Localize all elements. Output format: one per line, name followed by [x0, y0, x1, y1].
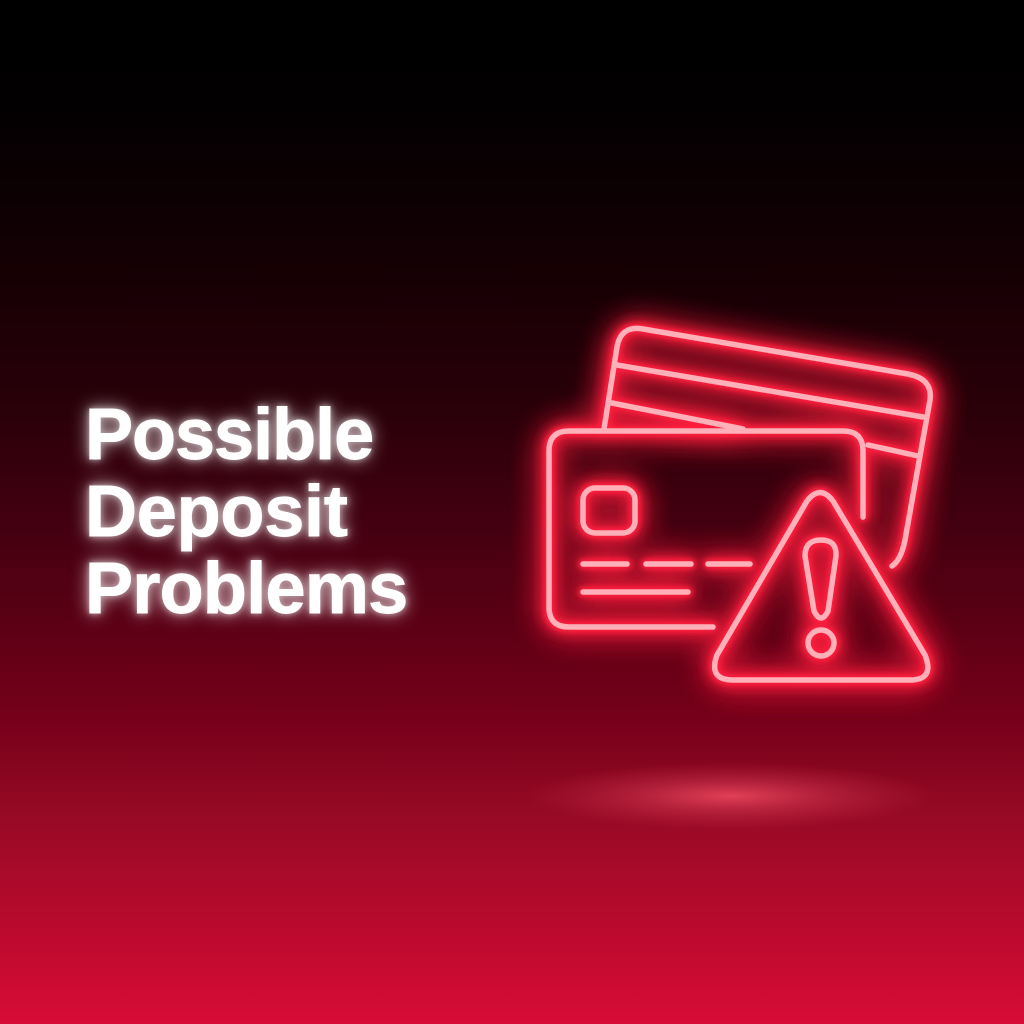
icon: credit cards with warning triangle	[549, 328, 930, 680]
back card	[604, 328, 930, 566]
front card	[549, 431, 863, 627]
icon: warning triangle	[715, 492, 928, 680]
title: Deposit	[85, 472, 348, 552]
title: Problems	[85, 549, 408, 629]
title: Possible	[85, 395, 373, 475]
title: Deposit	[85, 472, 348, 552]
floor glow beneath icon	[525, 762, 935, 830]
title: Possible	[85, 395, 373, 475]
title: Problems	[85, 549, 408, 629]
title	[85, 395, 408, 629]
